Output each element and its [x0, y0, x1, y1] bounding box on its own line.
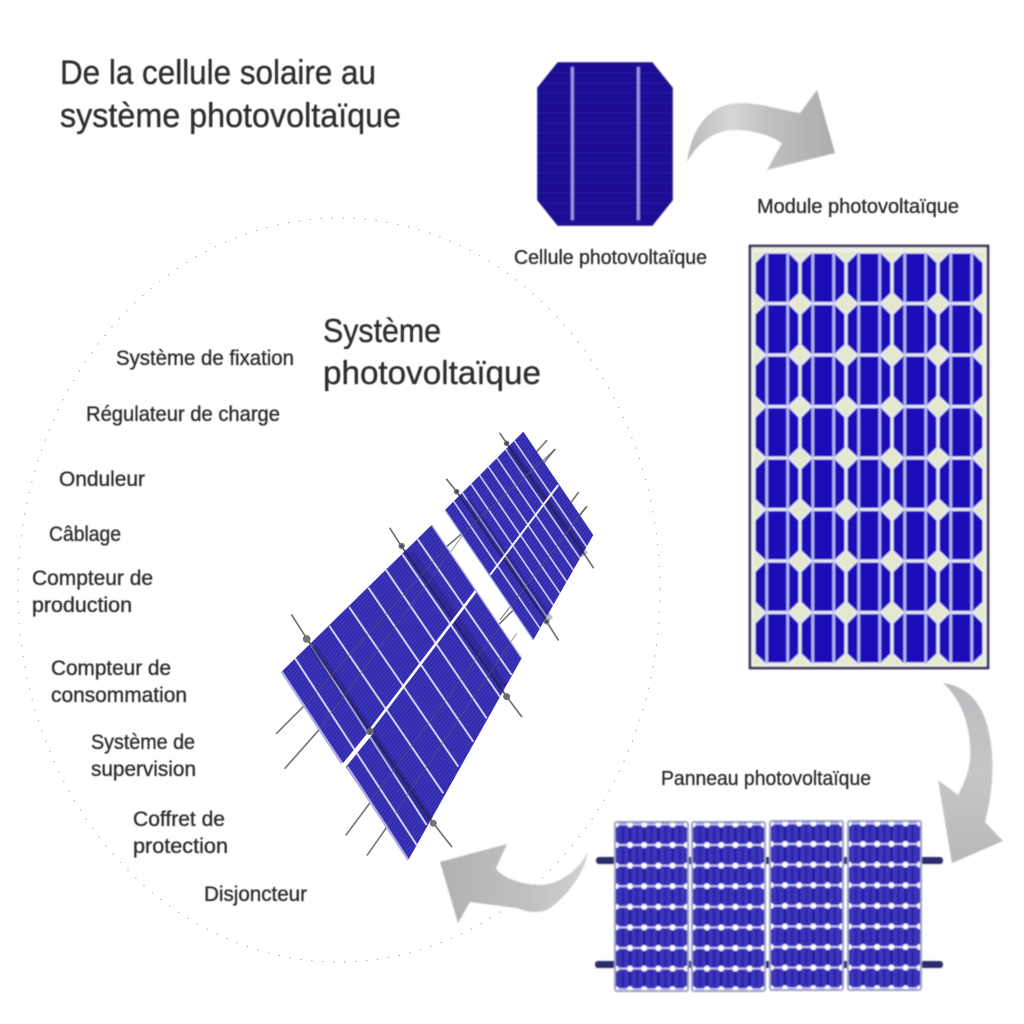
label: production meter: Compteur de	[32, 567, 153, 590]
upper array	[445, 432, 593, 640]
arrow: module to panel	[938, 683, 1003, 863]
icon: photovoltaic panel of four modules	[595, 821, 943, 991]
label: protection box: Coffret de	[133, 808, 225, 831]
label: circuit breaker: Disjoncteur	[204, 883, 307, 906]
label: protection box: protection	[133, 835, 228, 858]
arrow: cell to module	[687, 90, 835, 170]
label: charge controller: Régulateur de charge	[86, 403, 280, 426]
heading: photovoltaic system: Système	[323, 312, 441, 349]
label: wiring: Câblage	[49, 523, 121, 546]
list of system components	[32, 347, 307, 906]
module 1	[615, 822, 688, 991]
module 4	[848, 821, 921, 990]
label: consumption meter: Compteur de	[51, 657, 171, 680]
heading: photovoltaic system: photovoltaïque	[323, 354, 541, 391]
label: panel: Panneau photovoltaïque	[661, 768, 871, 790]
label: production meter: production	[32, 594, 132, 617]
module 3	[770, 821, 843, 990]
illustration: solar array in perspective	[277, 432, 593, 860]
module 2	[692, 822, 765, 991]
label: monitoring system: supervision	[91, 758, 196, 781]
heading: photovoltaic system	[323, 312, 541, 391]
rail ends and clamps	[292, 433, 593, 847]
icon: photovoltaic module	[750, 246, 988, 668]
arrow: panel to system	[440, 844, 588, 923]
label: protection box	[133, 808, 228, 858]
title	[60, 54, 401, 135]
title: De la cellule solaire au	[60, 54, 376, 92]
mounting rails	[595, 857, 943, 968]
dotted circle: photovoltaic system boundary	[18, 218, 660, 962]
label: cell: Cellule photovoltaïque	[514, 247, 707, 269]
support legs	[277, 441, 587, 855]
label: monitoring system: Système de	[91, 731, 195, 754]
label: monitoring system	[91, 731, 196, 781]
label: mounting system: Système de fixation	[116, 347, 294, 370]
icon: photovoltaic cell	[538, 63, 672, 225]
label: inverter: Onduleur	[59, 468, 145, 491]
label: production meter	[32, 567, 153, 617]
lower array	[282, 525, 522, 860]
label: consumption meter	[51, 657, 187, 707]
label: module: Module photovoltaïque	[757, 196, 959, 218]
label: consumption meter: consommation	[51, 684, 187, 707]
title: système photovoltaïque	[60, 97, 401, 135]
